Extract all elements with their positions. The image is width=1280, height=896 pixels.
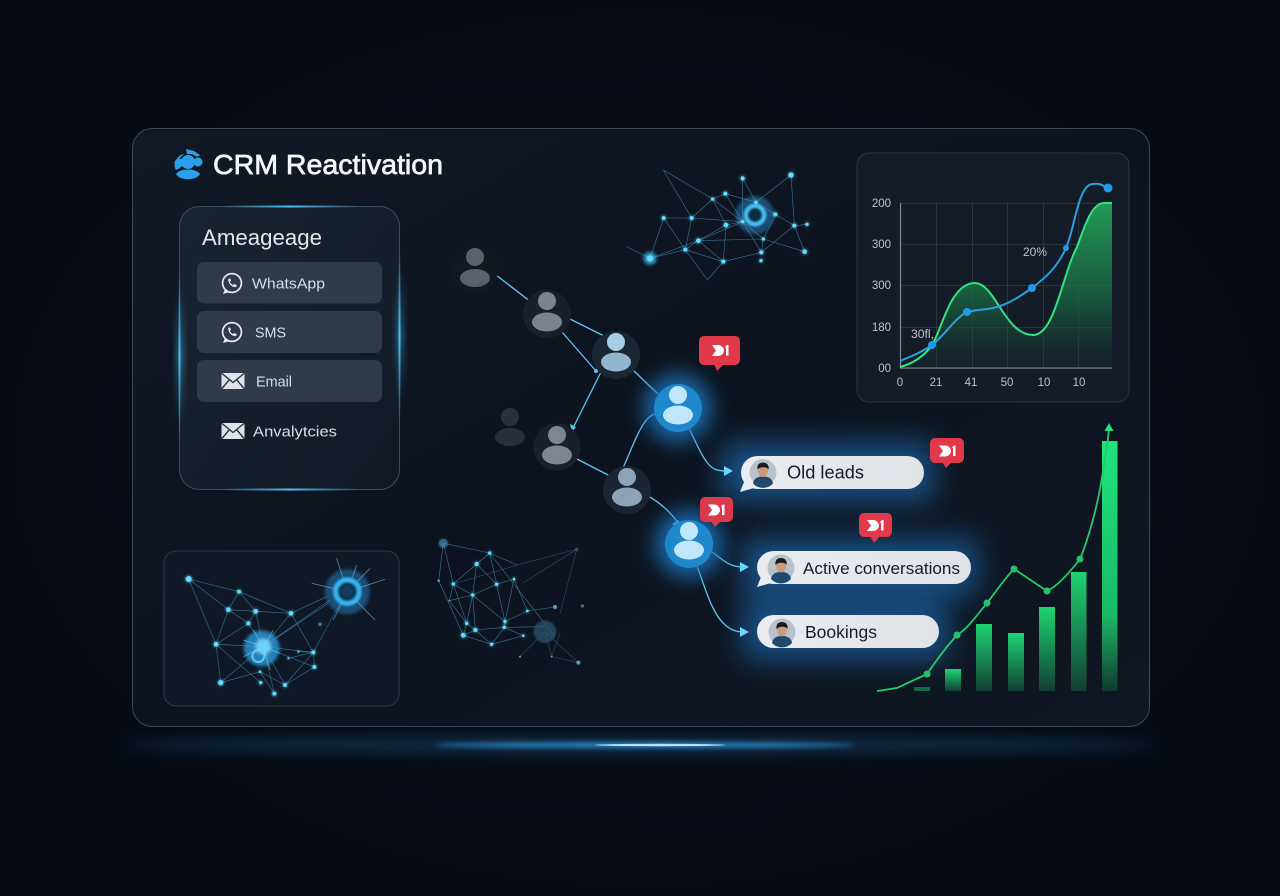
- growth bar chart: [877, 423, 1118, 691]
- row: Email: Email: [256, 374, 292, 390]
- floor light glow: [120, 738, 1160, 752]
- person: warming lead: [592, 331, 640, 379]
- y-axis labels: 300: [872, 280, 891, 292]
- person: active lead top: [644, 374, 712, 442]
- panel: line chart: [857, 153, 1129, 402]
- person: active lead bottom: [655, 510, 723, 578]
- y-axis labels: 200: [872, 198, 891, 210]
- notification badge on active lead: [700, 497, 733, 527]
- person: dormant lead 2: [523, 290, 571, 338]
- y-axis labels: 00: [878, 363, 891, 375]
- channel panel glow accents: [176, 206, 404, 490]
- row: WhatsApp: WhatsApp: [252, 276, 325, 292]
- channel panel heading: Ameageage: [202, 225, 322, 250]
- x-axis labels: 50: [1001, 377, 1013, 389]
- data label low: 30fl,: [911, 329, 934, 341]
- x-axis labels: 10: [1073, 377, 1085, 389]
- chat pill: Old leads: Old leads: [787, 462, 864, 482]
- main panel: [132, 128, 1150, 726]
- person: warming lead 2: [603, 466, 651, 514]
- row: SMS: [197, 311, 382, 353]
- growth trend line: [877, 423, 1114, 691]
- chat pill: Bookings: Bookings: [805, 622, 877, 642]
- glow behind chat pills: [722, 442, 978, 660]
- network: top centre: [627, 170, 809, 280]
- chart grid: [900, 203, 1112, 368]
- x-axis labels: 0: [897, 377, 903, 389]
- x-axis labels: [897, 377, 1085, 389]
- blue line series: [900, 184, 1112, 361]
- row: analytics: [222, 423, 337, 440]
- notification badge top: [699, 336, 740, 371]
- lead journey connectors: [496, 275, 749, 637]
- x-axis labels: 21: [930, 377, 942, 389]
- green area series: [900, 203, 1112, 368]
- notification badge active conversations: [859, 513, 892, 543]
- y-axis labels: 180: [872, 322, 891, 334]
- panel: bottom-left network: [164, 551, 399, 706]
- panel: channels: [176, 206, 404, 490]
- title: CRM Reactivation: [213, 149, 443, 180]
- chat pill: Active conversations: [757, 551, 971, 587]
- person: faded lead: [495, 408, 525, 446]
- y-axis labels: [872, 198, 891, 375]
- person: dormant lead 3: [534, 424, 580, 470]
- row: analytics: Anvalytcies: [253, 424, 337, 440]
- row: Email: [197, 360, 382, 402]
- row: WhatsApp: [197, 262, 382, 304]
- bars: [914, 441, 1118, 691]
- chat pill: Active conversations: Active conversations: [803, 559, 960, 578]
- network: bottom centre: [437, 539, 584, 665]
- data label high: 20%: [1023, 247, 1047, 259]
- person: dormant lead 1: [452, 247, 498, 293]
- x-axis labels: 10: [1038, 377, 1050, 389]
- network graph: [186, 558, 385, 696]
- y-axis labels: 300: [872, 239, 891, 251]
- chat pill: Old leads: [740, 456, 924, 492]
- chat pill: Bookings: [757, 615, 939, 648]
- row: SMS: SMS: [255, 324, 286, 342]
- x-axis labels: 41: [965, 377, 977, 389]
- logo icon: [174, 149, 202, 179]
- notification badge old leads: [930, 438, 964, 468]
